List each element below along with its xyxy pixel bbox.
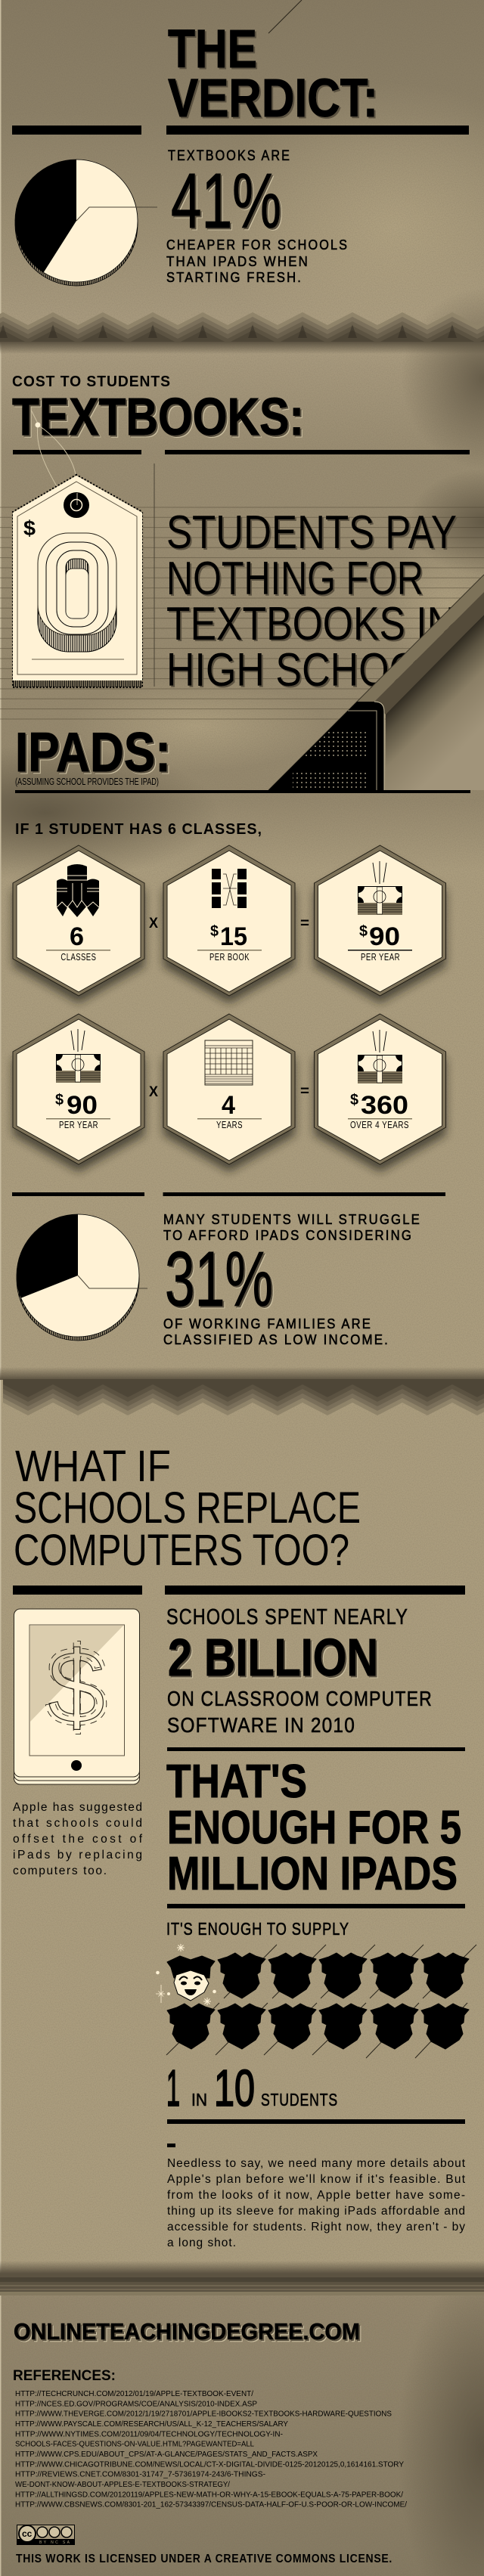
apple suggestion text: computers too. [13,1865,107,1877]
hexagon: 360 dollars over 4 years: OVER 4 YEARS [350,1119,409,1130]
hexagon: 90 dollars per year row two [13,1014,144,1172]
operator: equals: = [300,1083,309,1099]
license note: THIS WORK IS LICENSED UNDER A CREATIVE COMMONS LICENSE. [16,2553,392,2565]
pie chart: 31 percent [17,1214,147,1341]
references: WE-DONT-KNOW-ABOUT-APPLES-E-TEXTBOOKS-STRATEGY/ [15,2481,230,2489]
icon: ipad with dollar sign: $ [45,1623,108,1751]
low income stat text: MANY STUDENTS WILL STRUGGLE [163,1212,421,1227]
hexagon: 4 years [163,1014,295,1172]
ruled paper lines [0,507,484,719]
section question heading [14,1442,361,1575]
verdict stat text: THAN IPADS WHEN [166,254,309,269]
1 in 10 students stat: STUDENTS [261,2090,338,2109]
references: HTTP://WWW.CPS.EDU/ABOUT_CPS/AT-A-GLANCE/PAGES/STATS_AND_FACTS.ASPX [15,2450,318,2459]
five million ipads statement [166,1756,461,1900]
references: HTTP://WWW.PAYSCALE.COM/RESEARCH/US/ALL_K-12_TEACHERS/SALARY [15,2420,288,2429]
hexagon: 360 dollars over 4 years: $ [350,1092,358,1108]
closing paragraph [167,2157,466,2249]
title [168,20,378,129]
references: HTTP://WWW.NYTIMES.COM/2011/09/04/TECHNOLOGY/TECHNOLOGY-IN- [15,2430,283,2438]
five million ipads statement: THAT'S [166,1756,307,1808]
hexagon: 6 classes [13,845,144,1003]
low income stat text [163,1212,421,1347]
icon: money stack [358,861,402,915]
decorative title line [268,0,302,33]
icon: money stack [358,1030,402,1083]
apple suggestion text: iPads by replacing [13,1849,142,1861]
1 in 10 students stat: 1 [166,2060,180,2117]
book illustration [268,575,484,790]
textbooks heading: COST TO STUDENTS [12,374,171,390]
hexagon: 90 dollars per year row two: 90 [67,1091,98,1120]
hexagon: 6 classes: 6 [70,922,84,951]
section question heading: WHAT IF [15,1442,171,1491]
title: VERDICT: [168,69,378,129]
pie chart: 41 percent [15,160,157,286]
verdict stat text: TEXTBOOKS ARE [168,148,291,164]
low income stat text: TO AFFORD IPADS CONSIDERING [163,1228,413,1243]
apple suggestion text: Apple has suggested [13,1801,142,1814]
icon: creative commons badge: BY NC SA [39,2540,70,2545]
hexagon: 90 dollars per year: $ [359,923,368,940]
references: HTTP://NCES.ED.GOV/PROGRAMS/COE/ANALYSIS/2010-INDEX.ASP [15,2400,257,2408]
two billion stat: SOFTWARE IN 2010 [167,1713,355,1737]
references: REFERENCES: [13,2368,116,2384]
price tag icon [13,410,142,687]
calculation heading: IF 1 STUDENT HAS 6 CLASSES, [15,821,262,838]
references [13,2368,407,2509]
ipads heading: (ASSUMING SCHOOL PROVIDES THE IPAD) [15,776,159,787]
closing paragraph: accessible for students. Right now, they aren't - by [167,2221,465,2233]
verdict stat text: STARTING FRESH. [166,270,302,285]
chevron divider middle [0,1369,484,1415]
operator: times: X [149,916,158,932]
references: HTTP://WWW.CBSNEWS.COM/8301-201_162-57343397/CENSUS-DATA-HALF-OF-U.S-POOR-OR-LOW-INCOME/ [15,2501,407,2509]
closing paragraph: Needless to say, we need many more details about [167,2157,466,2170]
hexagon: 15 dollars per book: $ [210,923,219,940]
icon: creative commons badge: cc [22,2528,33,2539]
references: HTTP://REVIEWS.CNET.COM/8301-31747_7-57361974-243/6-THINGS- [15,2471,265,2479]
student icon grid [156,1944,476,2058]
icon: highlighted student [156,1944,216,2005]
hexagon: 360 dollars over 4 years [315,1014,446,1172]
closing paragraph: Apple's plan before we'll know if it's feasible. But [167,2173,466,2186]
references: HTTP://WWW.THEVERGE.COM/2012/1/19/2718701/APPLE-IBOOKS2-TEXTBOOKS-HARDWARE-QUESTIONS [15,2410,392,2419]
icon: creative commons badge [17,2525,74,2545]
icon: money stack [56,1029,101,1083]
icon: calendar [205,1040,253,1085]
references: HTTP://WWW.CHICAGOTRIBUNE.COM/NEWS/LOCAL/CT-X-DIGITAL-DIVIDE-0125-20120125,0,1614161.STORY [15,2460,404,2469]
two billion stat: SCHOOLS SPENT NEARLY [166,1605,408,1629]
ipads heading: IPADS: [15,722,171,783]
references: HTTP://TECHCRUNCH.COM/2012/01/19/APPLE-TEXTBOOK-EVENT/ [15,2390,253,2398]
apple suggestion text [13,1801,143,1877]
price tag icon: $ [23,516,36,540]
closing paragraph: from the looks of it now, Apple better have some- [167,2189,465,2202]
icon: ipad with dollar sign [14,1609,139,1784]
1 in 10 students stat [166,2060,338,2117]
closing paragraph: a long shot. [167,2237,236,2249]
hexagon: 15 dollars per book: 15 [220,922,247,951]
two billion stat: 2 BILLION [168,1628,378,1687]
hexagon: 360 dollars over 4 years: 360 [361,1091,408,1120]
hexagon: 15 dollars per book: PER BOOK [209,951,250,963]
low income stat text: CLASSIFIED AS LOW INCOME. [163,1332,389,1347]
icon: pencils [57,864,99,917]
closing paragraph: thing up its sleeve for making iPads affordable and [167,2205,465,2218]
apple suggestion text: offset the cost of [13,1833,143,1846]
references: SCHOOLS-FACES-QUESTIONS-ON-VALUE.HTML?PAGEWANTED=ALL [15,2441,254,2449]
hexagon: 90 dollars per year row two: $ [55,1092,64,1108]
hexagon: 90 dollars per year: PER YEAR [361,951,400,963]
hexagon: 6 classes: CLASSES [60,951,96,963]
operator: times: X [149,1084,158,1100]
apple suggestion text: that schools could [13,1817,142,1830]
verdict stat text [166,148,349,285]
chevron divider top [0,312,484,353]
hexagon: 4 years: 4 [222,1091,235,1120]
1 in 10 students stat: 10 [214,2060,255,2117]
hexagon: 4 years: YEARS [216,1119,243,1130]
vertical divider [154,463,155,687]
verdict stat text: CHEAPER FOR SCHOOLS [166,237,349,253]
section question heading: COMPUTERS TOO? [14,1526,349,1575]
two billion stat [166,1605,433,1737]
hexagon: 15 dollars per book [163,845,295,1003]
two billion stat: ON CLASSROOM COMPUTER [167,1687,433,1710]
section question heading: SCHOOLS REPLACE [14,1483,361,1533]
supply heading: IT'S ENOUGH TO SUPPLY [166,1919,349,1939]
references: HTTP://ALLTHINGSD.COM/20120119/APPLES-NEW-MATH-OR-WHY-A-15-EBOOK-EQUALS-A-75-PAPER-BOOK/ [15,2491,403,2499]
low income stat text: OF WORKING FAMILIES ARE [163,1316,372,1331]
operator: equals: = [300,916,309,932]
students pay nothing statement [166,506,457,696]
hexagon: 90 dollars per year: 90 [369,922,400,951]
hexagon: 90 dollars per year [315,845,446,1003]
footer divider band [0,2261,484,2295]
low income stat text: 31% [165,1235,273,1322]
icon: books [212,869,247,908]
title: THE [168,20,257,79]
textbooks heading: TEXTBOOKS: [12,387,304,446]
icon: ipad with dollar sign: $ [48,1630,105,1744]
verdict stat text: 41% [171,157,281,244]
1 in 10 students stat: IN [191,2090,207,2109]
site name: ONLINETEACHINGDEGREE.COM [14,2318,360,2345]
hexagon: 90 dollars per year row two: PER YEAR [59,1119,98,1130]
